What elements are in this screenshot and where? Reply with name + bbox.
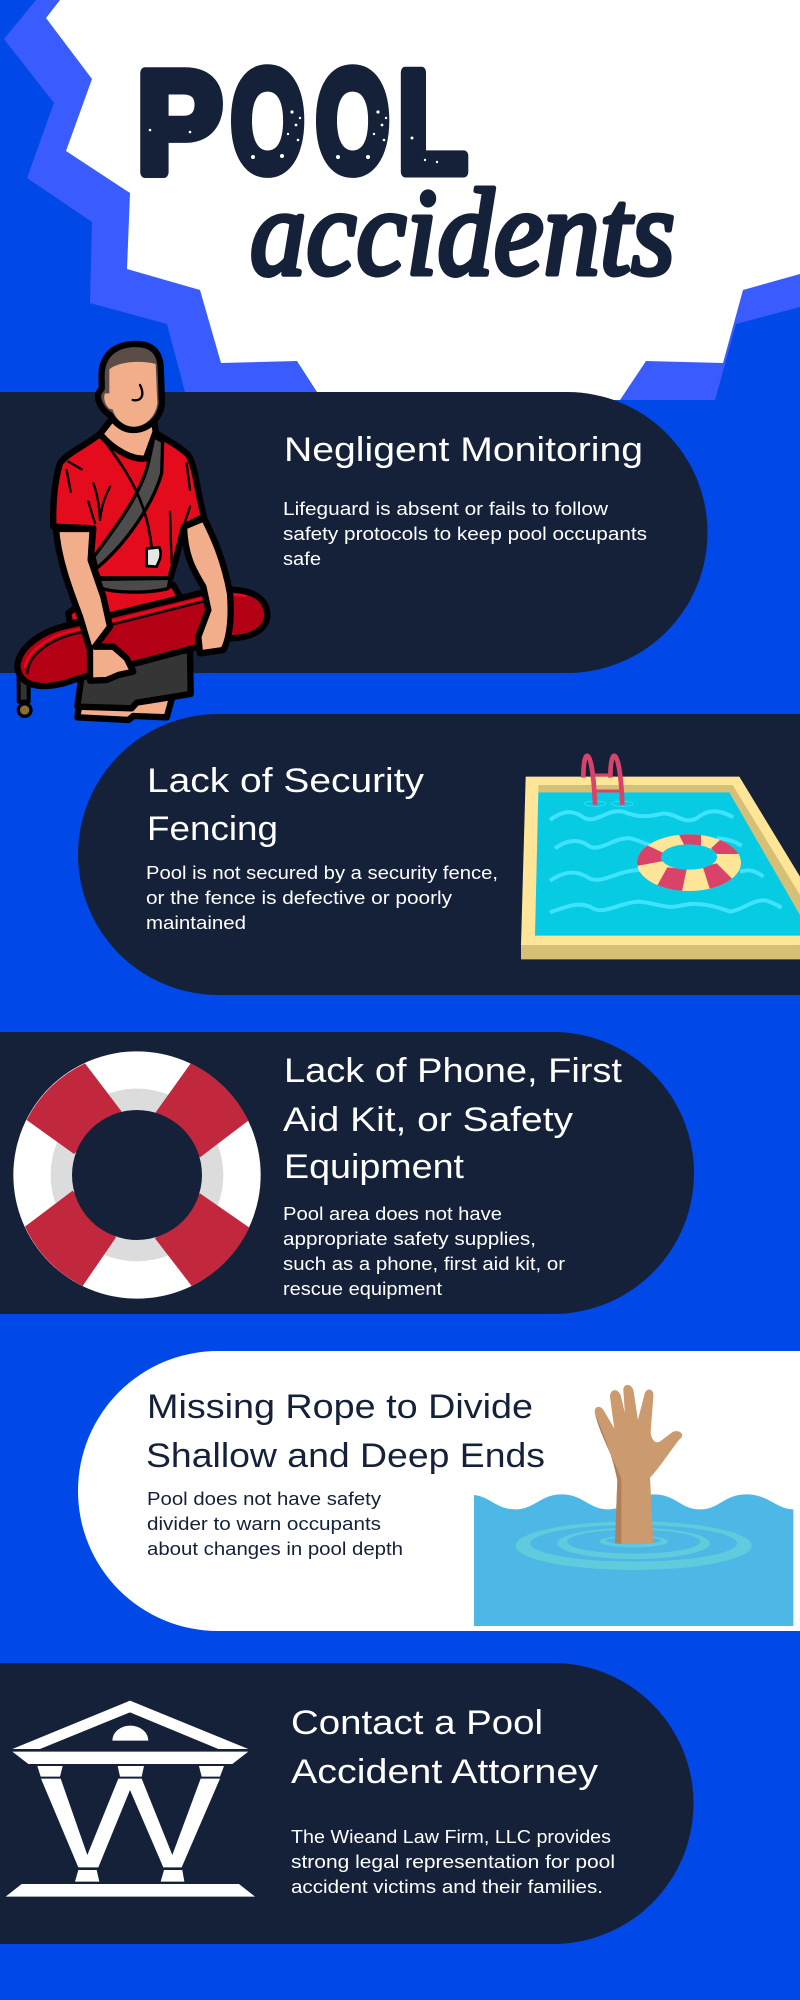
whistle	[101, 435, 161, 567]
belt	[99, 578, 170, 592]
water	[474, 1494, 793, 1626]
icon: law firm logo	[6, 1701, 255, 1897]
body text	[147, 1488, 403, 1559]
body text: strong legal representation for pool	[291, 1851, 615, 1872]
face	[104, 362, 157, 427]
icon: life preserver	[13, 1051, 261, 1299]
heading: Lack of Phone, First	[284, 1052, 623, 1090]
title word: POOL: O	[316, 40, 390, 202]
waves	[550, 811, 782, 912]
panel: lack of phone, first aid kit	[0, 1032, 694, 1314]
body text: maintained	[146, 912, 246, 933]
lower shirt	[68, 585, 182, 623]
body text	[291, 1826, 615, 1897]
title word: POOL: P	[136, 42, 222, 204]
title word: POOL: O	[231, 40, 305, 202]
body text: Pool area does not have	[283, 1203, 502, 1224]
heading: Accident Attorney	[291, 1753, 598, 1791]
heading	[283, 1052, 623, 1186]
shirt wrinkles	[67, 462, 190, 563]
shorts	[77, 650, 191, 708]
heading: Equipment	[284, 1148, 465, 1186]
title word: accidents: accidents	[250, 164, 675, 301]
body text: or the fence is defective or poorly	[146, 887, 453, 908]
title	[136, 40, 675, 301]
shirt	[53, 433, 204, 579]
icon: swimming pool	[521, 756, 800, 959]
icon: lifeguard	[17, 344, 267, 720]
body text	[283, 1203, 565, 1299]
pool deck	[521, 777, 800, 945]
swim ring	[635, 833, 743, 893]
ladder	[583, 756, 633, 806]
heading	[291, 1704, 598, 1791]
body text: The Wieand Law Firm, LLC provides	[291, 1826, 611, 1847]
panel: contact attorney	[0, 1663, 694, 1944]
body text: appropriate safety supplies,	[283, 1228, 536, 1249]
heading	[146, 1388, 545, 1475]
panel: missing rope	[78, 1351, 800, 1631]
panel: negligent monitoring	[0, 392, 708, 673]
header burst: white starburst	[46, 0, 800, 400]
icon: drowning hand in water	[474, 1386, 793, 1626]
head	[98, 344, 162, 430]
body text: Lifeguard is absent or fails to follow	[283, 498, 609, 519]
sash	[94, 437, 163, 568]
nose	[133, 385, 142, 400]
body text	[146, 862, 498, 933]
body text: Pool is not secured by a security fence,	[146, 862, 498, 883]
heading: Lack of Security	[147, 762, 424, 800]
hand	[595, 1386, 681, 1544]
arms	[56, 529, 133, 681]
water	[535, 792, 800, 936]
ripples	[516, 1521, 752, 1570]
heading: Negligent Monitoring	[284, 431, 643, 469]
neck	[100, 415, 156, 459]
body text: divider to warn occupants	[147, 1513, 381, 1534]
buoy	[17, 590, 267, 686]
buoy strap	[18, 673, 31, 716]
body text: about changes in pool depth	[147, 1538, 403, 1559]
body text: accident victims and their families.	[291, 1876, 603, 1897]
heading: Fencing	[147, 810, 278, 848]
heading	[147, 762, 424, 848]
heading: Aid Kit, or Safety	[283, 1101, 573, 1139]
heading: Contact a Pool	[291, 1704, 543, 1742]
header burst: light blue shadow	[4, 0, 800, 400]
body text	[283, 498, 647, 569]
body text: rescue equipment	[283, 1278, 442, 1299]
heading: Shallow and Deep Ends	[146, 1437, 545, 1475]
body text: safety protocols to keep pool occupants	[283, 523, 647, 544]
legs	[77, 693, 173, 720]
title word: POOL: L	[398, 41, 468, 203]
body text: Pool does not have safety	[147, 1488, 382, 1509]
body text: safe	[283, 548, 321, 569]
body text: such as a phone, first aid kit, or	[283, 1253, 565, 1274]
title word: POOL	[136, 40, 468, 204]
heading: Missing Rope to Divide	[147, 1388, 533, 1426]
panel: lack of security fencing	[78, 714, 800, 995]
